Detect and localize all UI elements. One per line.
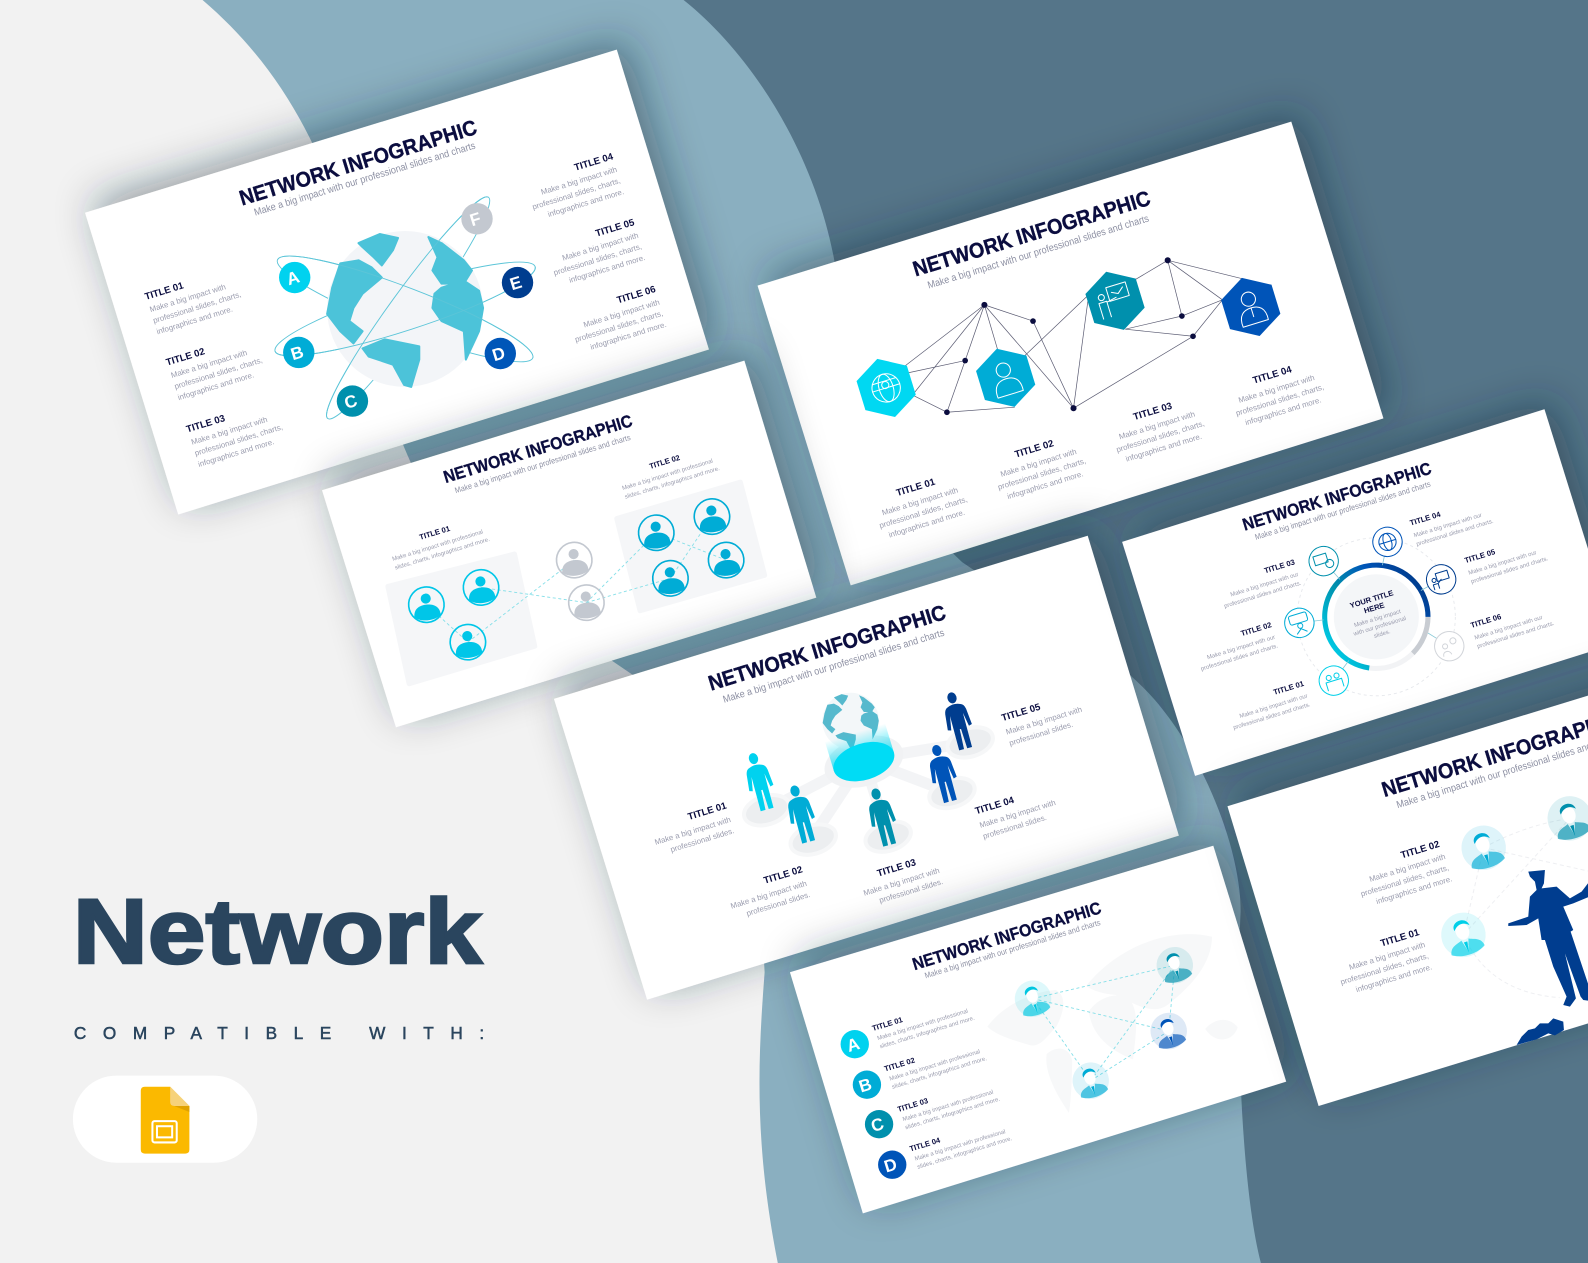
text block title 03: TITLE 03 (1263, 557, 1296, 575)
text block title 06: TITLE 06 (616, 284, 657, 306)
icon 01 (1315, 662, 1352, 699)
inner disc (1334, 574, 1419, 659)
legend A: slides, charts, infographics and more. (879, 1016, 976, 1050)
network nodes (944, 257, 1196, 415)
legend B (853, 1035, 988, 1099)
legend B: B (856, 1074, 874, 1096)
legend C: Make a big impact with professional (902, 1090, 994, 1123)
hub globe (822, 693, 879, 749)
text block title 05: Make a big impact with (561, 231, 639, 263)
globe sphere (327, 231, 483, 387)
grey ring segment (1413, 617, 1428, 653)
legend B: TITLE 02 (883, 1056, 916, 1073)
text block title 01: slides, charts, infographics and more. (394, 537, 491, 572)
legend D: slides, charts, infographics and more. (917, 1136, 1013, 1171)
text block title 01: TITLE 01 (418, 524, 451, 542)
text block title 06: professional slides, charts, (574, 309, 664, 344)
slide 6 heading: NETWORK INFOGRAPHIC (910, 898, 1104, 974)
text block title 06: Make a big impact with (582, 298, 661, 329)
text block title 01: professional slides and charts. (1233, 702, 1312, 731)
node E: E (507, 272, 524, 294)
text block title 01: TITLE 01 (1379, 927, 1421, 949)
slide: circular hub (1122, 409, 1588, 776)
text block title 04: professional slides and charts. (1416, 519, 1495, 548)
hexagon: man (1217, 270, 1285, 344)
icon 04 (1369, 524, 1406, 560)
text block title 03: TITLE 03 (185, 413, 227, 435)
slide 3 panel (322, 361, 816, 727)
orbit rings in front of globe (275, 187, 542, 419)
centre text: HERE (1363, 601, 1386, 615)
text block title 01: TITLE 01 (1272, 679, 1305, 697)
icon 03 (1305, 543, 1342, 579)
hexagon: presenter (1081, 264, 1149, 338)
icon 02 (1281, 605, 1318, 641)
text block title 01: TITLE 01 (143, 280, 186, 303)
text block title 02: Make a big impact with (730, 879, 808, 911)
dashed network lines (1463, 818, 1588, 998)
pale ring segment (1369, 653, 1413, 668)
text block title 02 (165, 331, 267, 402)
hexagon: globe person (852, 351, 920, 425)
legend D: Make a big impact with professional (914, 1129, 1006, 1163)
centre text: Make a big impact (1354, 609, 1402, 629)
text block title 03 (858, 851, 944, 909)
legend B: slides, charts, infographics and more. (891, 1056, 988, 1091)
compatible with label: COMPATIBLE WITH: (74, 1023, 484, 1043)
text block title 02 (1352, 838, 1453, 910)
hub glow (825, 723, 899, 788)
text block title 02: TITLE 02 (1399, 839, 1441, 861)
background: dark blue shape (506, 0, 1588, 1263)
world map (977, 923, 1249, 1128)
slide 3 heading: NETWORK INFOGRAPHIC (441, 410, 635, 487)
dashed connections (1033, 965, 1175, 1081)
text block title 03: TITLE 03 (876, 857, 917, 880)
text block title 01: Make a big impact with (654, 815, 732, 847)
node A (279, 262, 310, 293)
slide 7 panel (1227, 643, 1588, 1106)
text block title 02: infographics and more. (1006, 469, 1084, 501)
text block title 04 (1227, 357, 1328, 429)
slide 4 subtitle: Make a big impact with our professional slides and charts (722, 628, 946, 706)
text block title 02: professional slides and charts. (1200, 643, 1279, 673)
text block title 04 (524, 151, 626, 223)
text block title 02: TITLE 02 (1014, 438, 1055, 460)
text block title 01: infographics and more. (888, 508, 966, 540)
main heading: Network (73, 880, 483, 983)
legend A: Make a big impact with professional (877, 1009, 969, 1042)
legend A: TITLE 01 (871, 1015, 904, 1033)
text block title 05: professional slides, charts, (553, 242, 643, 277)
text block title 02: professional slides, charts, (1360, 863, 1450, 899)
text block title 02: professional slides, charts, (997, 456, 1087, 492)
slide: people groups (322, 361, 816, 727)
text block title 01: professional slides, charts, (152, 290, 242, 325)
slide 5 heading: NETWORK INFOGRAPHIC (1240, 458, 1434, 535)
centre text (1343, 587, 1409, 646)
slide: world map avatars (790, 846, 1286, 1213)
text block title 01: infographics and more. (155, 305, 234, 336)
text block title 05: Make a big impact with (1005, 705, 1083, 737)
slide: people around globe (554, 536, 1179, 1000)
text block title 05 (1463, 533, 1549, 585)
icon 05 (1423, 561, 1459, 598)
node D (485, 338, 516, 369)
node C: C (342, 390, 360, 413)
text block title 04: infographics and more. (1244, 395, 1322, 427)
text block title 03: infographics and more. (1125, 432, 1203, 464)
node C (337, 385, 368, 417)
text block title 05: TITLE 05 (1463, 547, 1496, 565)
legend C: TITLE 03 (896, 1096, 929, 1114)
text block title 01: professional slides, charts, (1339, 951, 1430, 987)
node A: A (284, 266, 302, 289)
text block title 01: Make a big impact with (149, 282, 227, 314)
text block title 01 (1226, 679, 1312, 731)
text block title 04: TITLE 04 (974, 795, 1016, 817)
slide: hexagon network (758, 122, 1383, 585)
text block title 03 (1216, 557, 1302, 610)
legend C (865, 1076, 1001, 1138)
text block title 05: Make a big impact with our (1468, 550, 1537, 577)
text block title 04: infographics and more. (547, 187, 625, 219)
network lines (905, 260, 1242, 412)
hub connectors (767, 742, 970, 841)
background: light blue curved shape (203, 0, 1261, 1263)
avatar 03 (1542, 791, 1588, 846)
slide 2 subtitle: Make a big impact with our professional slides and charts (926, 214, 1150, 292)
node B (283, 337, 314, 368)
text block title 06 (1469, 598, 1555, 650)
text block title 03: Make a big impact with our (1230, 572, 1299, 598)
icon: google slides (141, 1087, 189, 1154)
text block title 03: TITLE 03 (1132, 401, 1174, 423)
text block title 02: Make a big impact with our (1207, 635, 1276, 661)
legend C: C (868, 1113, 886, 1136)
text block title 02: TITLE 02 (648, 453, 681, 471)
text block title 04: professional slides, charts, (531, 176, 622, 212)
text block title 04 (974, 784, 1060, 841)
text block title 01: Make a big impact with (1348, 940, 1426, 972)
text block title 02 (989, 431, 1090, 503)
text block title 02: Make a big impact with (170, 348, 248, 380)
text block title 04 (1409, 495, 1495, 548)
text block title 01: TITLE 01 (895, 477, 937, 499)
avatar 01 (1436, 907, 1491, 963)
pads (740, 722, 997, 860)
legend D: D (882, 1154, 899, 1176)
text block title 02: Make a big impact with (1368, 852, 1447, 884)
slide: man with network (1227, 643, 1588, 1106)
text block title 03: professional slides and charts. (1224, 581, 1302, 610)
text block title 02: professional slides, charts, (173, 356, 264, 391)
slide: globe network (85, 50, 709, 515)
person icons cyan (407, 568, 501, 662)
centre text: slides. (1373, 629, 1392, 640)
node E (502, 267, 533, 298)
slide 1 subtitle: Make a big impact with our professional slides and charts (253, 141, 477, 219)
text block title 05: TITLE 05 (594, 217, 636, 239)
text block title 02: professional slides. (745, 890, 811, 918)
text block title 03: professional slides, charts, (1115, 419, 1206, 454)
text block title 01 (1332, 927, 1433, 998)
slide 1 panel (85, 50, 709, 515)
globe continents (327, 234, 483, 387)
slide 2 panel (758, 122, 1383, 585)
text block title 05: professional slides and charts. (1471, 556, 1549, 585)
legend A (841, 995, 976, 1058)
text block title 02 (617, 443, 721, 501)
text block title 05: TITLE 05 (1000, 702, 1042, 724)
orbit rings behind globe (268, 187, 542, 429)
centre text: YOUR TITLE (1349, 588, 1394, 610)
text block title 04: Make a big impact with our (1413, 513, 1483, 539)
text block title 06: TITLE 06 (1469, 612, 1502, 630)
text block title 03: professional slides, charts, (194, 422, 284, 458)
icon 06 (1431, 628, 1468, 665)
gradient ring segment (1325, 565, 1428, 668)
text block title 02: TITLE 02 (1240, 620, 1273, 638)
person icons grey (555, 541, 606, 622)
text block title 04: TITLE 04 (573, 151, 615, 174)
text block title 05: professional slides. (1008, 720, 1074, 748)
text block title 06: Make a big impact with our (1474, 615, 1544, 641)
text block title 01: infographics and more. (1355, 962, 1433, 994)
slide 2 heading: NETWORK INFOGRAPHIC (910, 186, 1153, 281)
text block title 02: Make a big impact with professional (622, 459, 714, 492)
text block title 02: slides, charts, infographics and more. (624, 466, 721, 501)
icon connectors (1299, 542, 1449, 681)
dashed connections (426, 517, 726, 642)
text block title 05: infographics and more. (568, 253, 646, 285)
text block title 01: professional slides, charts, (878, 495, 969, 530)
node B: B (288, 341, 306, 364)
text block title 03: Make a big impact with (1118, 410, 1196, 441)
text block title 04: professional slides, charts, (1235, 382, 1325, 418)
text block title 03 (1107, 393, 1209, 465)
slide 6 panel (790, 846, 1286, 1213)
avatars (1010, 942, 1198, 1103)
man silhouette (1508, 870, 1588, 1007)
node F (461, 203, 493, 234)
slide 4 panel (554, 536, 1179, 1000)
text block title 02: Make a big impact with (999, 447, 1078, 479)
text block title 02 (725, 864, 811, 922)
text block title 04: Make a big impact with (540, 165, 618, 197)
text block title 01: Make a big impact with professional (392, 529, 484, 563)
text block title 03 (185, 398, 287, 469)
text block title 02: TITLE 02 (762, 864, 804, 887)
avatar 02 (1456, 820, 1511, 875)
legend D (878, 1115, 1013, 1179)
text block title 01 (870, 469, 972, 541)
hub platform (818, 727, 910, 797)
node F: F (467, 208, 483, 230)
text block title 03: Make a big impact with (190, 415, 268, 447)
text block title 01 (143, 265, 246, 337)
slide 5 panel (1122, 409, 1588, 776)
text block title 01 (387, 514, 491, 572)
text block title 06: professional slides and charts. (1477, 621, 1555, 650)
legend B: Make a big impact with professional (889, 1049, 981, 1083)
text block title 04: TITLE 04 (1252, 364, 1294, 387)
text block title 02 (1193, 620, 1279, 673)
text block title 03: professional slides. (878, 877, 944, 905)
text block title 05 (545, 217, 647, 288)
text block title 02: infographics and more. (1375, 874, 1453, 906)
text block title 03: Make a big impact with (862, 866, 941, 898)
hexagon: woman (972, 341, 1040, 415)
text block title 01: Make a big impact with (881, 486, 959, 517)
centre text: with our professional (1352, 616, 1407, 638)
text block title 01: professional slides. (669, 826, 735, 854)
text block title 02: infographics and more. (177, 370, 255, 402)
dashed outer circle (1297, 538, 1455, 696)
slide 4 heading: NETWORK INFOGRAPHIC (705, 600, 949, 696)
figures (740, 689, 978, 848)
person icons blue (637, 497, 746, 598)
text block title 06 (566, 284, 668, 355)
globe fragment (1517, 1018, 1564, 1045)
text block title 04: Make a big impact with (978, 798, 1057, 830)
left group panel (388, 554, 535, 684)
text block title 01 (649, 800, 736, 858)
text block title 01: Make a big impact with our (1239, 693, 1309, 720)
text block title 02: TITLE 02 (165, 346, 206, 369)
text block title 06: infographics and more. (589, 320, 668, 352)
legend C: slides, charts, infographics and more. (905, 1097, 1001, 1131)
right group panel (617, 482, 765, 611)
text block title 04: professional slides. (982, 813, 1048, 841)
slide 6 subtitle: Make a big impact with our professional slides and charts (924, 918, 1102, 980)
text block title 04: Make a big impact with (1237, 373, 1316, 405)
slide 5 subtitle: Make a big impact with our professional slides and charts (1254, 480, 1432, 542)
text block title 05 (1000, 690, 1086, 748)
legend A: A (844, 1033, 862, 1056)
slide 3 subtitle: Make a big impact with our professional slides and charts (454, 433, 632, 495)
text block title 03: infographics and more. (197, 437, 275, 469)
text block title 04: TITLE 04 (1409, 510, 1442, 528)
node D: D (490, 342, 507, 365)
compatibility pill (73, 1076, 257, 1163)
slide 1 heading: NETWORK INFOGRAPHIC (236, 115, 480, 210)
legend D: TITLE 04 (908, 1135, 942, 1153)
text block title 01: TITLE 01 (687, 800, 729, 823)
